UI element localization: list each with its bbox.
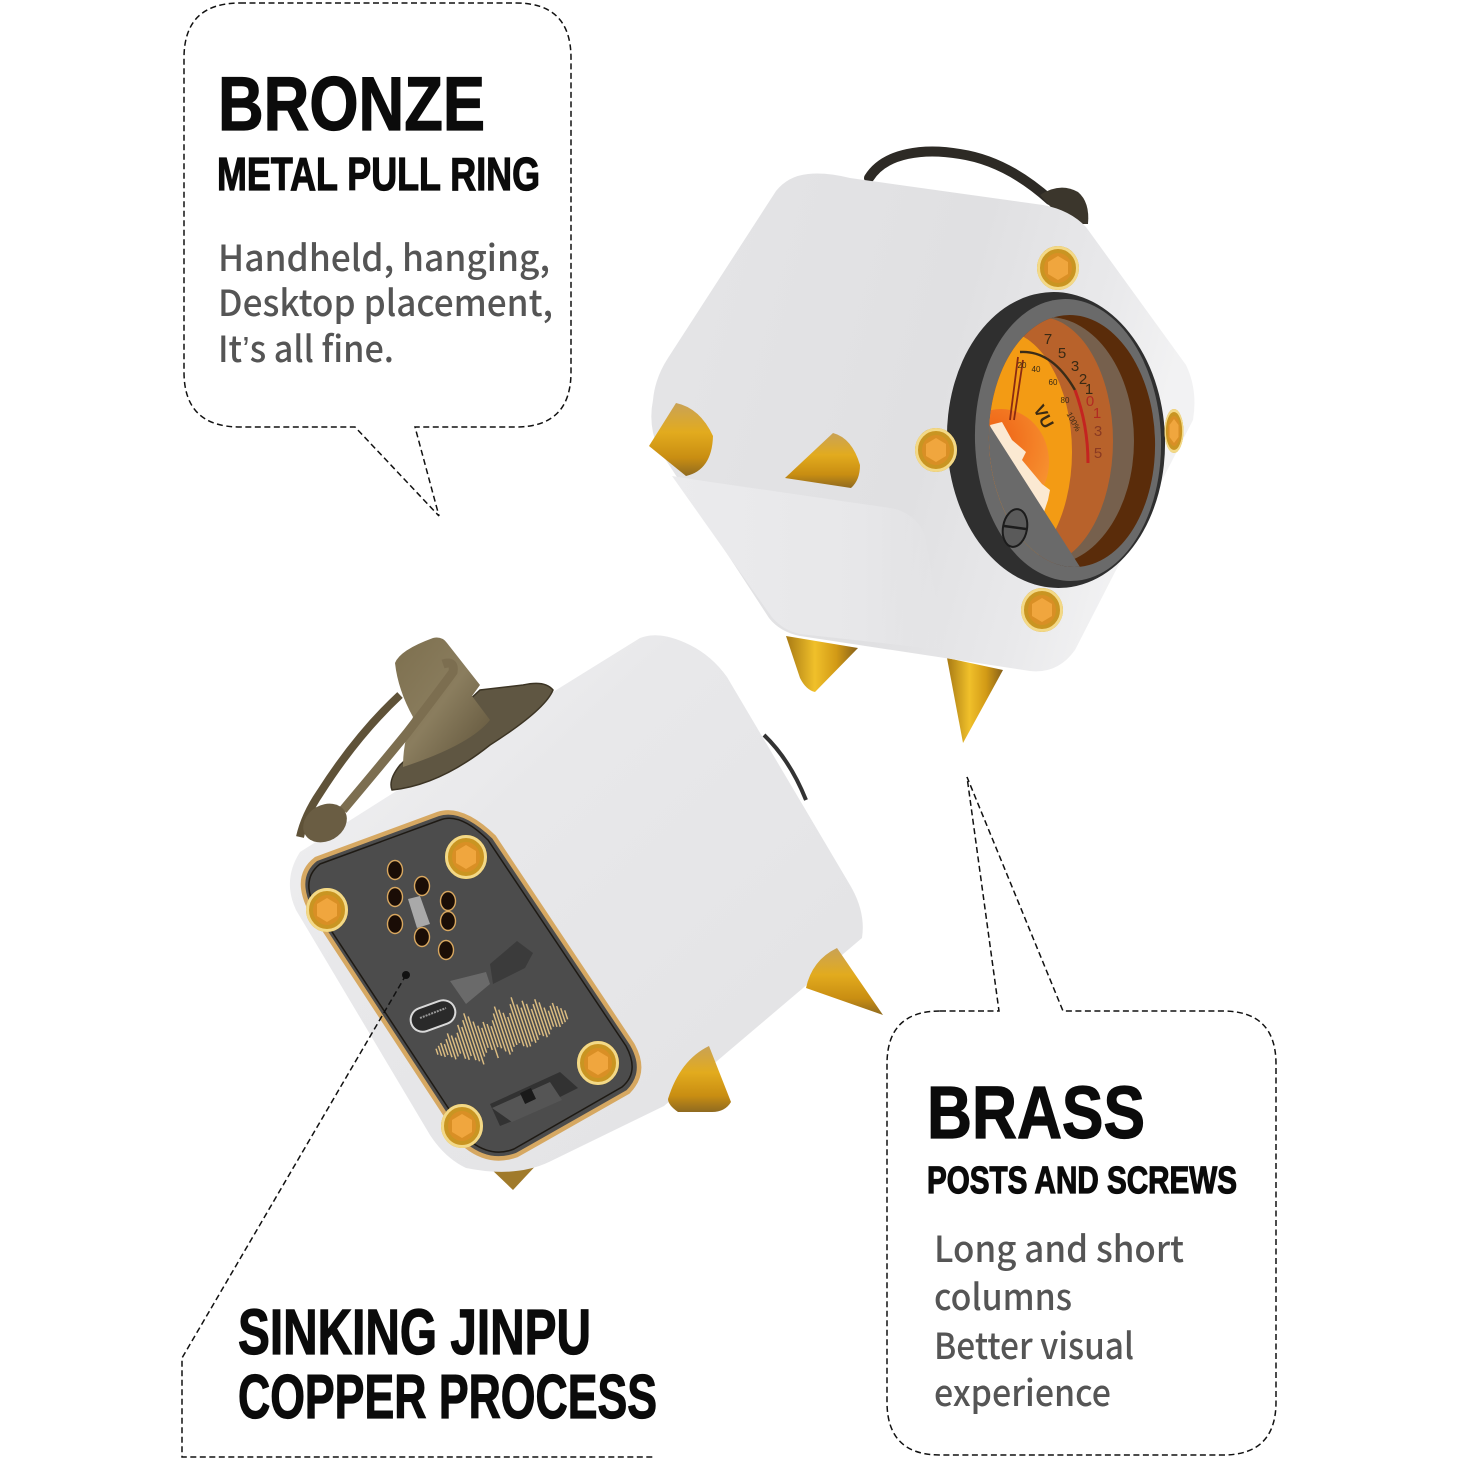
meter: percent scale: 100% <box>1065 411 1082 433</box>
cable connector <box>1040 188 1088 224</box>
body text: placement <box>218 230 553 373</box>
spike: rear right long <box>806 948 883 1015</box>
spike: left <box>649 403 713 476</box>
bronze ring: rear loop <box>300 695 400 837</box>
body text: placement: Desktop placement, <box>218 275 553 327</box>
spike: rear right short <box>668 1046 731 1112</box>
body text: placement: Handheld, hanging, <box>218 230 550 282</box>
heading: BRASS: BRASS <box>927 1071 1145 1154</box>
heading: SINKING JINPU: SINKING JINPU <box>238 1296 591 1368</box>
body text: columns: Better visual <box>934 1318 1134 1370</box>
screw: panel right <box>577 1041 619 1085</box>
heading: COPPER PROCESS: COPPER PROCESS <box>238 1363 657 1432</box>
screw: panel left <box>306 888 348 932</box>
meter: upper scale numbers: 3 <box>1094 423 1102 440</box>
meter: grey lower wedge <box>989 425 1080 567</box>
callout: sinking jinpu copper process <box>182 971 657 1457</box>
panel: USB-C port <box>407 997 459 1035</box>
body text: columns: columns <box>934 1269 1072 1321</box>
bronze ring: end bulb <box>296 796 354 850</box>
meter: percent scale: 40 <box>1032 365 1041 374</box>
screw: right <box>1165 409 1183 453</box>
spike: bottom short <box>786 636 858 692</box>
bronze ring: front loop <box>343 663 453 810</box>
meter: upper scale numbers: 1 <box>1085 381 1093 398</box>
meter: upper scale numbers: 3 <box>1071 358 1079 375</box>
callout outline with tail <box>887 777 1276 1455</box>
body text: columns <box>934 1221 1184 1417</box>
bronze ring: base disc <box>391 683 553 790</box>
meter: percent scale <box>1018 361 1082 433</box>
leader outline <box>182 975 653 1457</box>
meter: needle <box>1010 357 1023 420</box>
callout: brass posts and screws <box>887 777 1276 1455</box>
callout outline with tail <box>184 3 571 516</box>
body text: columns: experience <box>934 1365 1111 1417</box>
subheading: POSTS AND SCREWS: POSTS AND SCREWS <box>927 1160 1237 1202</box>
body text: columns: Long and short <box>934 1221 1184 1273</box>
dark edge of meter <box>764 735 806 800</box>
device: top view with VU meter <box>649 152 1194 743</box>
device: rear view with panel <box>290 635 883 1190</box>
meter: VU label: VU <box>1030 402 1057 432</box>
meter: upper scale numbers <box>1044 331 1102 462</box>
meter: upper scale numbers: 7 <box>1044 331 1052 348</box>
panel: slide switch <box>490 1072 578 1126</box>
meter: red arc <box>1075 390 1088 463</box>
screw: bottom <box>1021 588 1063 632</box>
meter: scale arc <box>1020 352 1075 390</box>
screw: left <box>915 428 957 472</box>
meter: upper scale numbers: 5 <box>1058 345 1066 362</box>
screw: top <box>1037 246 1079 290</box>
meter: percent scale: 60 <box>1049 378 1058 387</box>
panel: speaker holes <box>388 860 456 960</box>
meter: upper scale numbers: 0 <box>1086 393 1094 410</box>
meter: grey bezel <box>970 296 1166 584</box>
white housing <box>651 174 1194 671</box>
screw: panel top <box>445 835 487 879</box>
heading: BRONZE: BRONZE <box>218 62 485 147</box>
bronze ring: knob <box>395 638 490 767</box>
spike: bottom long <box>947 658 1003 743</box>
meter: percent scale: 80 <box>1061 396 1070 405</box>
panel: centre chip <box>408 896 430 928</box>
meter: white logo strip <box>990 422 1050 512</box>
panel: sound waveform <box>427 984 574 1076</box>
meter: slotted adjuster screw <box>1000 507 1030 549</box>
meter: black outer ring <box>942 288 1170 592</box>
meter: upper scale numbers: 2 <box>1079 371 1087 388</box>
white housing <box>290 635 863 1172</box>
spike: middle <box>785 433 860 488</box>
screw: panel bottom <box>441 1104 483 1148</box>
lower facet shading <box>672 476 945 650</box>
panel: back plate <box>303 812 639 1158</box>
subheading: METAL PULL RING: METAL PULL RING <box>217 148 540 200</box>
body text: placement: It’s all fine. <box>218 321 394 373</box>
leader dot <box>402 971 410 979</box>
meter: upper scale numbers: 5 <box>1094 445 1102 462</box>
spike: rear bottom <box>490 1160 541 1190</box>
meter: dial window <box>988 315 1156 567</box>
meter: upper scale numbers: 1 <box>1093 405 1101 422</box>
cable ring <box>869 152 1050 200</box>
meter: percent scale: 20 <box>1018 361 1027 370</box>
panel: type-c cable icon <box>450 941 533 1004</box>
callout: bronze metal pull ring <box>184 3 571 516</box>
